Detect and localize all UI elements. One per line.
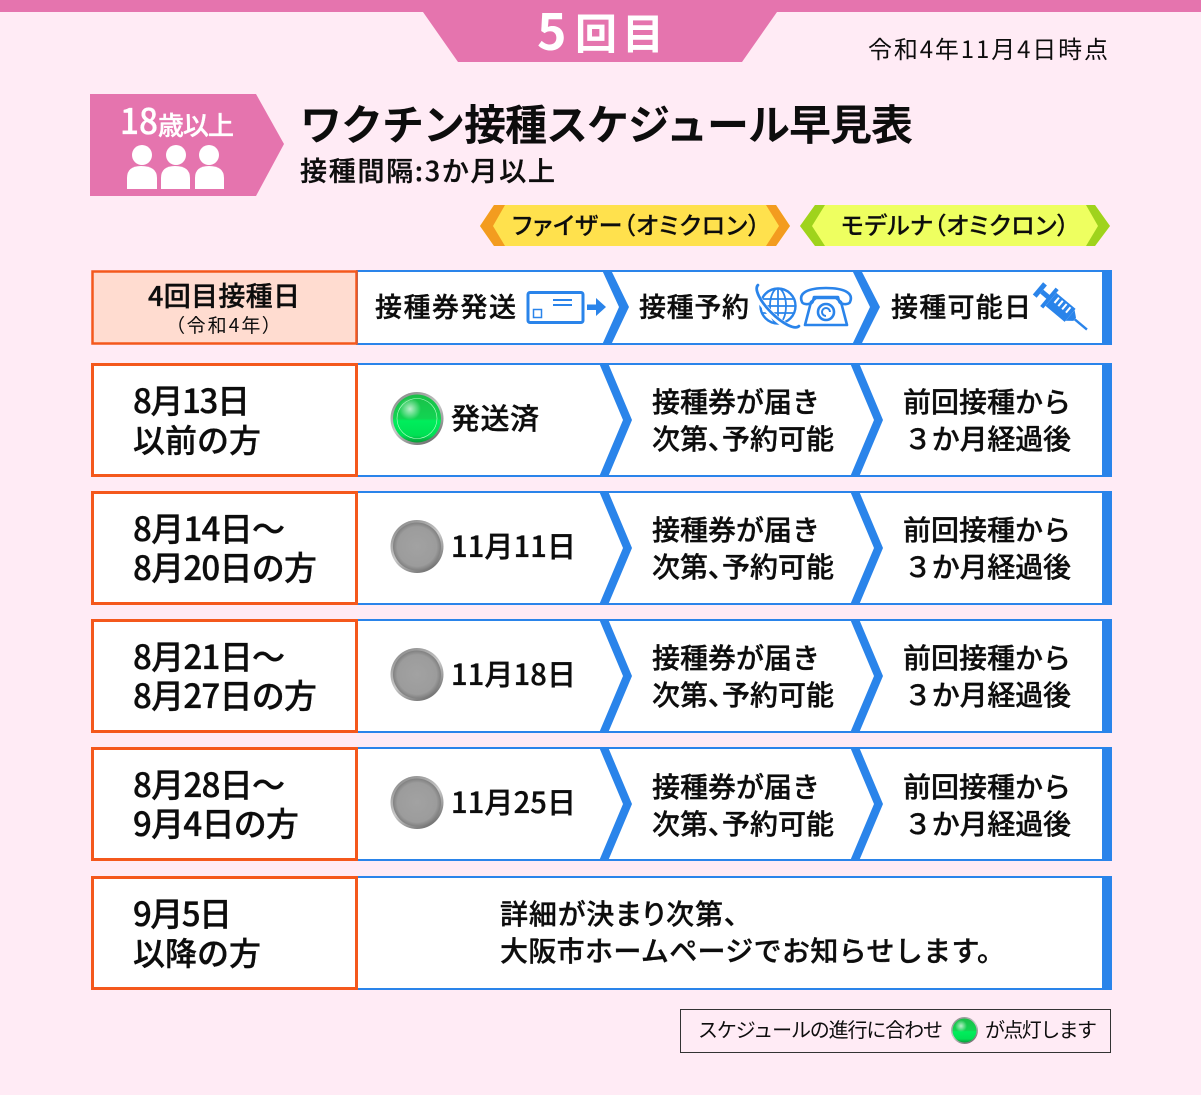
icon: telephone	[801, 288, 851, 325]
availability note: 前回接種から	[903, 381, 1071, 421]
age badge: 18	[120, 94, 158, 145]
notice text: 大阪市ホームページでお知らせします。	[500, 930, 1005, 970]
availability note: ３か月経過後	[904, 803, 1071, 843]
availability note	[903, 381, 1071, 458]
booking note	[652, 509, 834, 586]
booking note	[652, 381, 834, 458]
header: flow steps panel	[357, 270, 1112, 345]
date box: 9月4日の方	[133, 798, 299, 846]
date box: 8月14日～	[133, 503, 285, 551]
notice panel	[357, 876, 1112, 990]
top band with tab	[0, 0, 1201, 62]
date box	[92, 620, 356, 732]
header row	[92, 270, 1112, 345]
date box: 8月27日の方	[133, 670, 317, 718]
booking note: 次第、予約可能	[652, 546, 834, 586]
row: Sep 5 onward	[92, 876, 1112, 990]
sending date: 11月18日	[451, 652, 576, 694]
sending date: 11月25日	[451, 780, 576, 822]
booking note: 次第、予約可能	[652, 418, 834, 458]
booking note	[652, 637, 834, 714]
heading: 5th dose: 回	[575, 1, 617, 62]
legend note	[680, 1010, 1110, 1052]
availability note: ３か月経過後	[904, 418, 1071, 458]
date box: 以前の方	[133, 416, 261, 462]
heading: 5th dose	[537, 0, 664, 65]
legend note: スケジュールの進行に合わせ	[698, 1014, 943, 1043]
flow panel	[357, 363, 1112, 477]
header: booking: 接種予約	[639, 286, 749, 325]
status: sent: 発送済	[451, 396, 539, 438]
date box	[92, 878, 356, 988]
title: ワクチン接種スケジュール早見表	[300, 92, 913, 153]
lamp: grey	[390, 520, 444, 573]
header: ticket sending: 接種券発送	[375, 286, 516, 325]
flow panel	[357, 619, 1112, 733]
row: Aug 28 to Sep 4	[92, 747, 1112, 861]
lamp: grey	[390, 648, 444, 701]
sending date: 11月11日	[451, 524, 576, 566]
age badge	[90, 94, 284, 196]
icon: syringe	[1030, 279, 1095, 339]
flow panel	[357, 491, 1112, 605]
legend tag: Moderna: モデルナ（オミクロン）	[841, 206, 1069, 241]
availability note	[903, 766, 1071, 843]
flow panel	[357, 747, 1112, 861]
notice text: 詳細が決まり次第、	[500, 893, 738, 933]
icon: ticket envelope with arrow	[528, 292, 606, 322]
date box	[92, 364, 356, 476]
date box	[92, 748, 356, 860]
date box	[92, 492, 356, 604]
booking note: 接種券が届き	[652, 637, 820, 677]
notice text	[500, 893, 1005, 970]
legend note: が点灯します	[985, 1014, 1097, 1043]
availability note: ３か月経過後	[904, 546, 1071, 586]
legend tag: Moderna	[800, 205, 1110, 246]
booking note: 接種券が届き	[652, 509, 820, 549]
row: up to Aug 13	[92, 363, 1112, 477]
availability note: ３か月経過後	[904, 674, 1071, 714]
heading: 5th dose: 目	[622, 1, 664, 62]
booking note: 接種券が届き	[652, 766, 820, 806]
subtitle: 接種間隔:3か月以上	[300, 150, 555, 189]
booking note: 次第、予約可能	[652, 803, 834, 843]
header: fourth dose date: 4回目接種日	[148, 275, 300, 314]
legend tag: Pfizer: ファイザー（オミクロン）	[512, 206, 760, 241]
date note: 令和4年11月4日時点	[868, 30, 1108, 65]
availability note: 前回接種から	[903, 766, 1071, 806]
header: available date: 接種可能日	[891, 286, 1031, 325]
date box: 以降の方	[133, 929, 261, 975]
lamp: green	[390, 392, 444, 445]
header: fourth dose date: （令和4年）	[175, 311, 272, 338]
availability note	[903, 637, 1071, 714]
header: fourth dose date	[92, 272, 356, 344]
booking note: 接種券が届き	[652, 381, 820, 421]
date box: 9月5日	[133, 888, 232, 936]
age badge: 歳以上	[158, 106, 234, 143]
row: Aug 14 to Aug 20	[92, 491, 1112, 605]
booking note: 次第、予約可能	[652, 674, 834, 714]
lamp: grey	[390, 776, 444, 829]
date box: 8月20日の方	[133, 542, 317, 590]
availability note	[903, 509, 1071, 586]
icon: globe	[750, 285, 799, 334]
date box: 8月21日～	[133, 631, 285, 679]
booking note	[652, 766, 834, 843]
date box: 8月13日	[133, 375, 250, 423]
date box: 8月28日～	[133, 759, 285, 807]
legend tag: Pfizer	[480, 205, 790, 246]
availability note: 前回接種から	[903, 637, 1071, 677]
availability note: 前回接種から	[903, 509, 1071, 549]
row: Aug 21 to Aug 27	[92, 619, 1112, 733]
